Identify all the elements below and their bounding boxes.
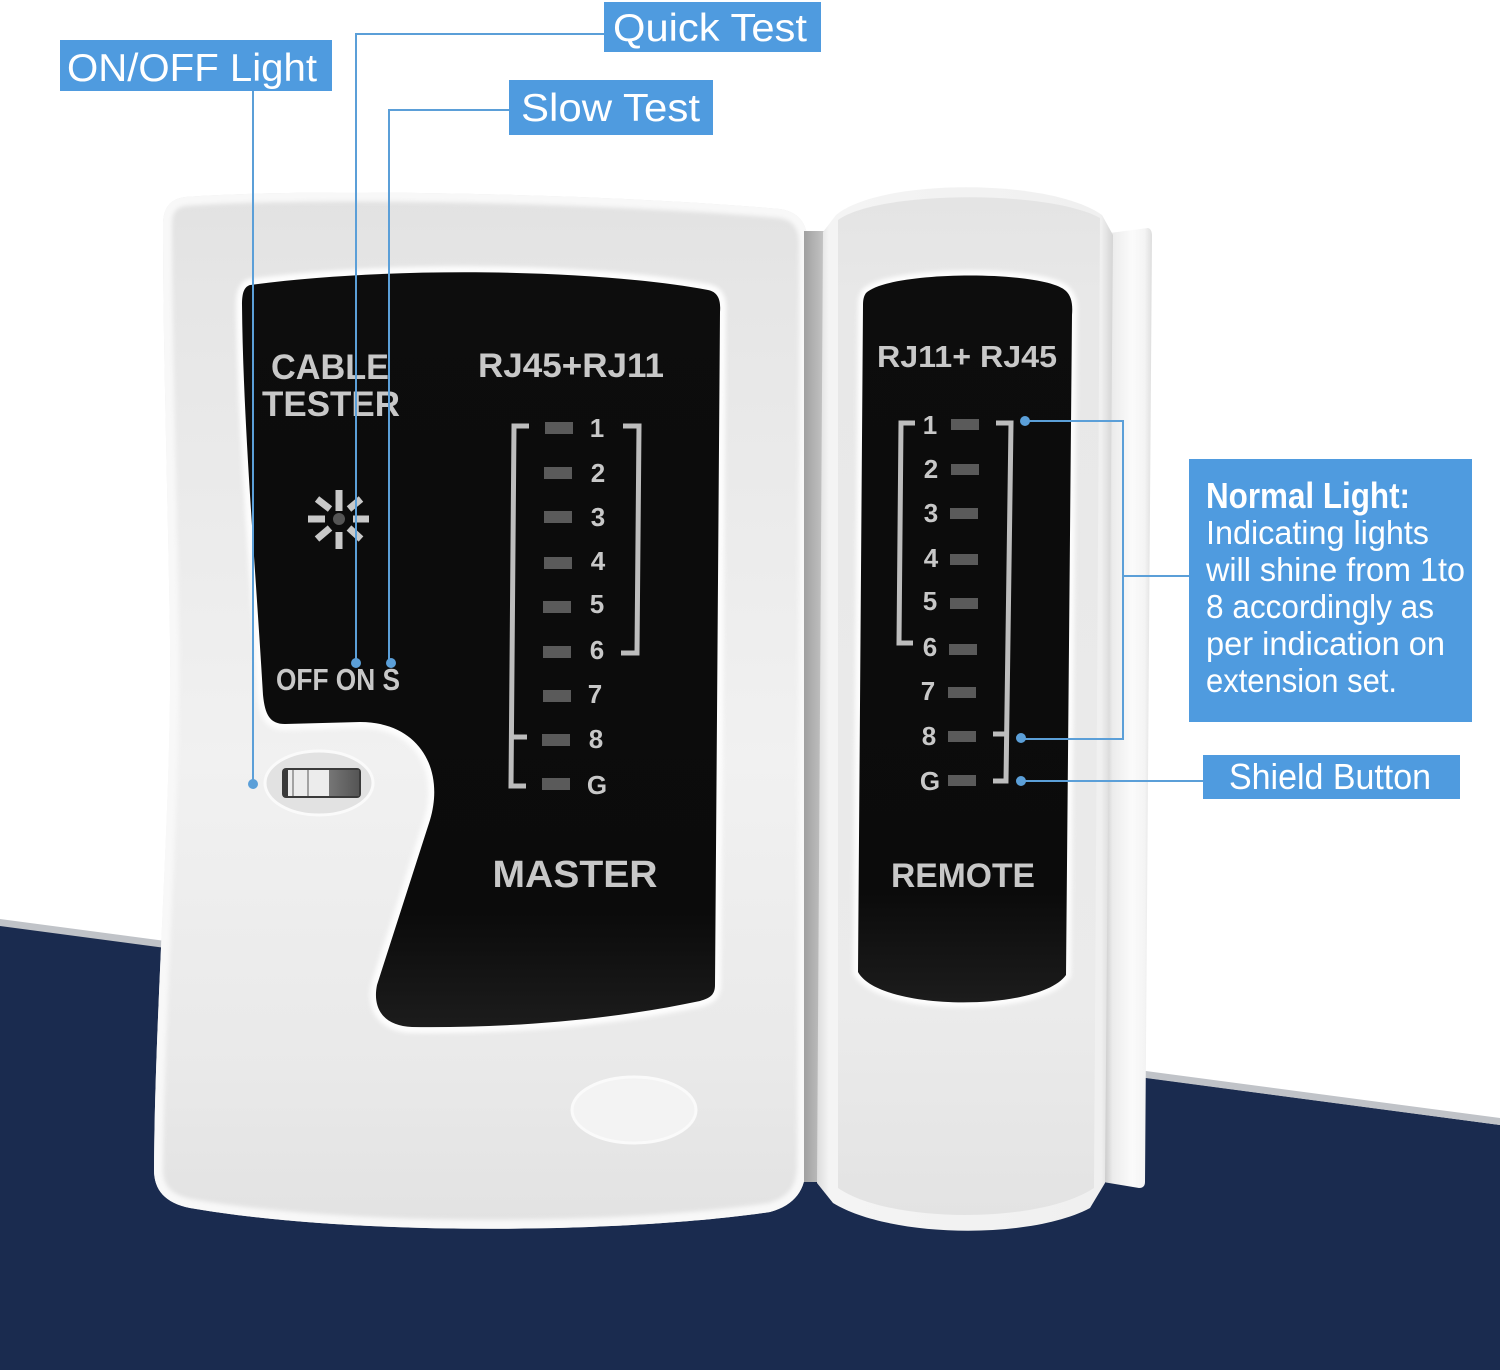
label: Slow Test xyxy=(509,80,713,135)
master black panel xyxy=(242,272,720,1027)
master LED scale: 6 xyxy=(590,635,604,665)
navy background band xyxy=(0,919,1500,1370)
master LED scale xyxy=(511,413,639,800)
master casing xyxy=(154,193,808,1229)
callout: Normal Light: extension set. xyxy=(1206,662,1397,699)
master LED scale: 1 xyxy=(590,413,604,443)
callout: Normal Light: 8 accordingly as xyxy=(1206,588,1434,625)
remote LED scale: 7 xyxy=(921,676,935,706)
remote LED scale: 6 xyxy=(923,632,937,662)
remote LED scale: 8 xyxy=(922,721,936,751)
sun icon xyxy=(308,490,369,549)
oval button xyxy=(572,1077,696,1143)
callout: Normal Light: Indicating lights xyxy=(1206,514,1429,551)
callout: Normal Light: Normal Light: xyxy=(1206,475,1410,516)
master LED scale: 4 xyxy=(591,546,606,576)
remote LED scale: 2 xyxy=(924,454,938,484)
callout: Normal Light: per indication on xyxy=(1206,625,1445,662)
master labels: RJ45+RJ11 xyxy=(478,347,664,385)
label: Slow Test: Slow Test xyxy=(521,87,700,130)
remote LED scale: 1 xyxy=(923,410,937,440)
remote LED scale: 4 xyxy=(924,543,939,573)
master LED scale: 5 xyxy=(590,589,604,619)
remote labels: REMOTE xyxy=(891,857,1035,895)
callout leader lines xyxy=(253,34,1204,784)
master LED scale: G xyxy=(587,770,607,800)
master labels: MASTER xyxy=(492,854,658,896)
side rail xyxy=(1103,228,1152,1188)
callout: Normal Light: will shine from 1to xyxy=(1205,551,1465,588)
remote labels xyxy=(877,339,1057,895)
hinge strip xyxy=(804,231,826,1182)
master LED scale: 2 xyxy=(591,458,605,488)
master LED scale: 7 xyxy=(588,679,602,709)
master labels: TESTER xyxy=(262,385,400,424)
remote labels: RJ11+ RJ45 xyxy=(877,339,1057,374)
master labels: CABLE xyxy=(271,348,389,387)
remote LED scale: 5 xyxy=(923,586,937,616)
label: ON/OFF Light: ON/OFF Light xyxy=(67,47,317,90)
remote casing xyxy=(817,187,1113,1231)
master LED scale: 3 xyxy=(591,502,605,532)
device: master unit xyxy=(154,193,808,1229)
callout: Normal Light xyxy=(1189,459,1472,722)
remote black panel xyxy=(858,275,1072,1002)
device: remote unit xyxy=(804,187,1152,1231)
power switch xyxy=(265,751,373,815)
leader dots xyxy=(248,416,1030,789)
label: Shield Button: Shield Button xyxy=(1229,756,1431,797)
master LED scale: 8 xyxy=(589,724,603,754)
master labels: OFF ON S xyxy=(276,662,400,697)
master labels xyxy=(262,347,664,896)
label: Quick Test: Quick Test xyxy=(613,7,807,50)
remote LED scale: G xyxy=(920,766,940,796)
remote LED scale xyxy=(899,410,1011,796)
remote LED scale: 3 xyxy=(924,498,938,528)
